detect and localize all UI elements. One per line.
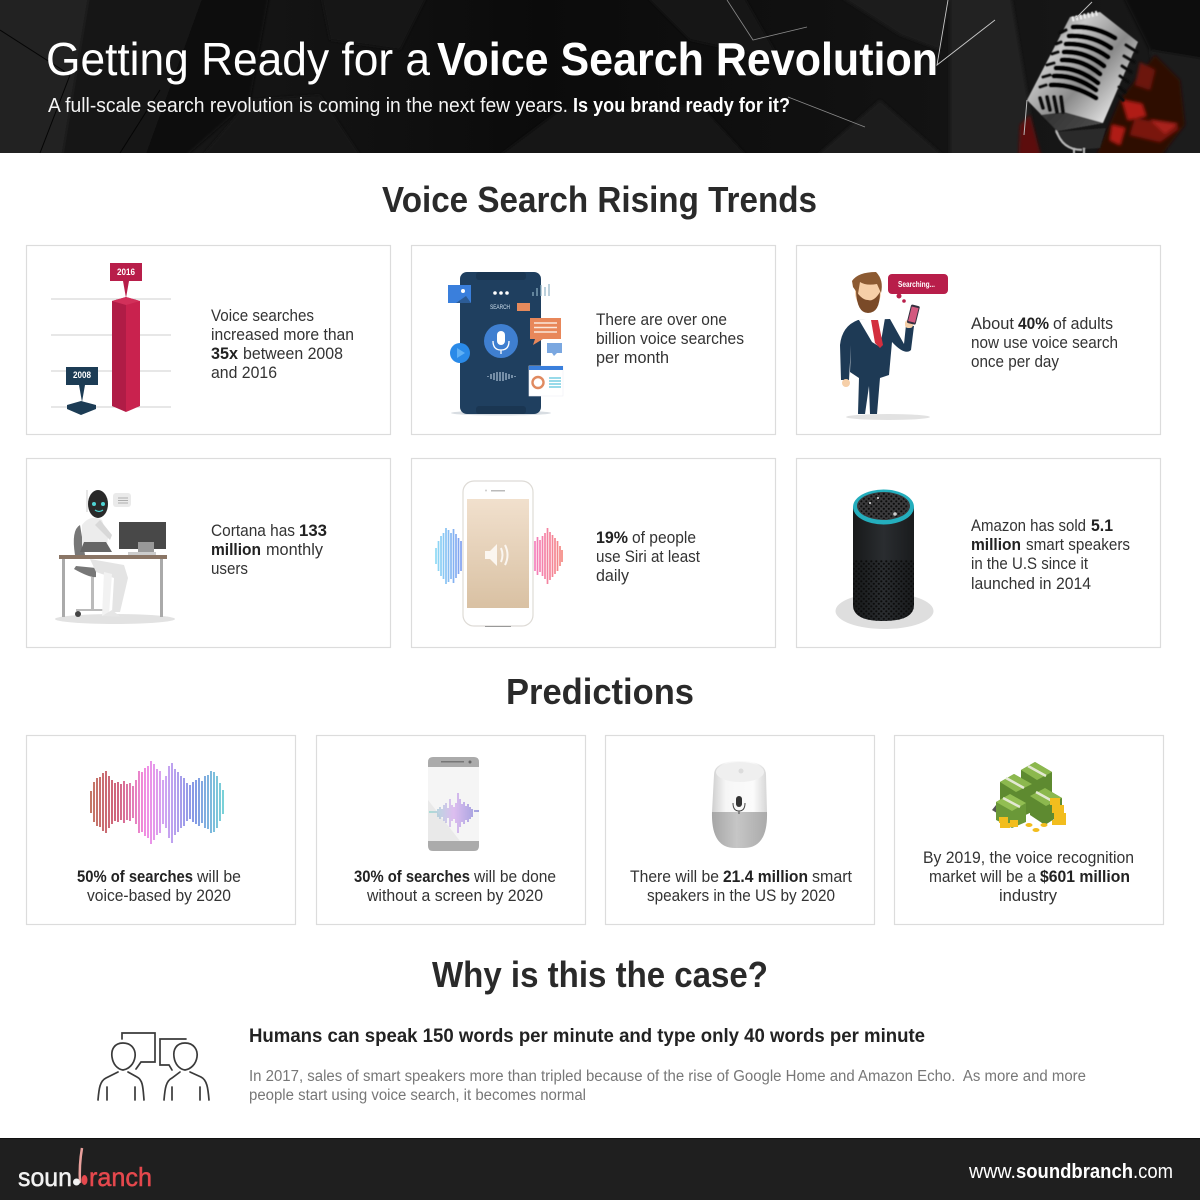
icon: studio microphone [1018, 2, 1185, 170]
icon: stacks of money and coins [992, 762, 1066, 832]
text block: why explanation [249, 1026, 1086, 1104]
logo: soundbranch: soun [18, 1162, 72, 1192]
stat text: use Siri at least [596, 548, 700, 566]
icon: phone with sound waves [436, 481, 562, 626]
bar chart: 2008 vs 2016: 2008 [73, 370, 91, 380]
header banner [0, 0, 1200, 170]
stat text: million [211, 541, 261, 559]
panel: one billion searches [412, 246, 776, 434]
website url: soundbranch [1016, 1161, 1133, 1183]
stat text: once per day [971, 353, 1060, 371]
website url [968, 1161, 1173, 1183]
panel: Amazon smart speakers [796, 458, 1160, 648]
icon: bearded man with phone: Searching... [898, 280, 935, 289]
icon: bearded man with phone [840, 272, 948, 420]
stat text: $601 million [1040, 868, 1130, 886]
footer bar [0, 1138, 1200, 1200]
bar chart: 2008 vs 2016: 2016 [117, 267, 135, 277]
stat text: Voice searches [211, 307, 314, 325]
text block: why explanation: people start using voice search, it becomes normal [249, 1087, 586, 1104]
stat text: 50% of searches [77, 868, 193, 886]
icon: Amazon Echo speaker [836, 490, 934, 629]
panel: voice searches 35x [26, 246, 390, 434]
stat text: 5.1 [1091, 517, 1113, 535]
stat text: of adults [1053, 315, 1113, 333]
icon: smartphone with voice search [448, 272, 563, 416]
subtitle: A full-scale search revolution is coming in the next few years. [48, 95, 568, 117]
stat text: 35x [211, 345, 239, 363]
heading: Predictions: Predictions [506, 671, 694, 712]
stat text: There are over one [596, 311, 727, 329]
stat text [971, 517, 1130, 593]
text block: why explanation: In 2017, sales of smart speakers more than tripled because of the rise of Google Home and Amazon Echo. As more and more [249, 1068, 1086, 1085]
icon: robot at desk [55, 490, 175, 624]
stat text: will be [196, 868, 241, 886]
stat text: increased more than [211, 326, 354, 344]
stat text: users [211, 560, 248, 578]
icon: colourful sound wave [91, 761, 223, 844]
stat text: industry [999, 887, 1058, 905]
stat text [596, 311, 744, 367]
stat text [630, 868, 852, 905]
stat text: market will be a [929, 868, 1037, 886]
stat text: voice-based by 2020 [87, 887, 231, 905]
stat text: daily [596, 567, 630, 585]
title [46, 33, 938, 85]
heading: Voice Search Rising Trends: Voice Search Rising Trends [382, 179, 817, 220]
panel: 21.4 million smart speakers [606, 736, 874, 924]
stat text: billion voice searches [596, 330, 744, 348]
icon: screenless phone with wave [428, 757, 479, 851]
panel: Cortana users [26, 458, 390, 648]
stat text: smart speakers [1026, 536, 1130, 554]
stat text [971, 315, 1118, 371]
text block: why explanation: Humans can speak 150 words per minute and type only 40 words per minute [249, 1026, 925, 1047]
stat text: speakers in the US by 2020 [647, 887, 835, 905]
stat text [211, 307, 354, 382]
panel: 40% of adults [796, 246, 1160, 434]
stat text [923, 849, 1134, 905]
stat text: will be done [473, 868, 556, 886]
logo: soundbranch [18, 1148, 152, 1192]
stat text: per month [596, 349, 669, 367]
website url: .com [1133, 1161, 1173, 1183]
stat text: About [971, 315, 1014, 333]
stat text: 133 [299, 522, 327, 540]
stat text: 21.4 million [723, 868, 808, 886]
stat text: now use voice search [971, 334, 1118, 352]
stat text: between 2008 [243, 345, 343, 363]
icon: two people talking [98, 1033, 209, 1100]
bar chart: 2008 vs 2016 [51, 263, 171, 415]
stat text: of people [632, 529, 696, 547]
heading: Why is this the case?: Why is this the case? [432, 954, 768, 995]
stat text [596, 529, 700, 585]
stat text: without a screen by 2020 [366, 887, 543, 905]
stat text: There will be [630, 868, 719, 886]
stat text: 19% [596, 529, 628, 547]
logo: soundbranch: ranch [89, 1162, 152, 1192]
panel: 50% of searches [26, 736, 296, 924]
icon: smartphone with voice search: SEARCH [490, 305, 510, 311]
panel: $601 million market [894, 736, 1164, 924]
stat text [77, 868, 241, 905]
stat text: 30% of searches [354, 868, 470, 886]
title: Getting Ready for a [46, 33, 430, 85]
stat text: By 2019, the voice recognition [923, 849, 1134, 867]
stat text: launched in 2014 [971, 575, 1091, 593]
stat text: and 2016 [211, 364, 277, 382]
stat text: smart [812, 868, 852, 886]
subtitle: Is you brand ready for it? [573, 95, 790, 117]
stat text [354, 868, 556, 905]
panel: 30% without a screen [316, 736, 586, 924]
stat text [211, 522, 327, 578]
stat text: Cortana has [211, 522, 295, 540]
stat text: monthly [266, 541, 324, 559]
panel: Siri usage [412, 458, 776, 648]
stat text: million [971, 536, 1021, 554]
stat text: in the U.S since it [971, 555, 1088, 573]
title: Voice Search Revolution [437, 33, 938, 85]
website url: www. [968, 1161, 1016, 1183]
stat text: Amazon has sold [971, 517, 1086, 535]
stat text: 40% [1018, 315, 1049, 333]
icon: Google Home speaker [712, 761, 767, 848]
